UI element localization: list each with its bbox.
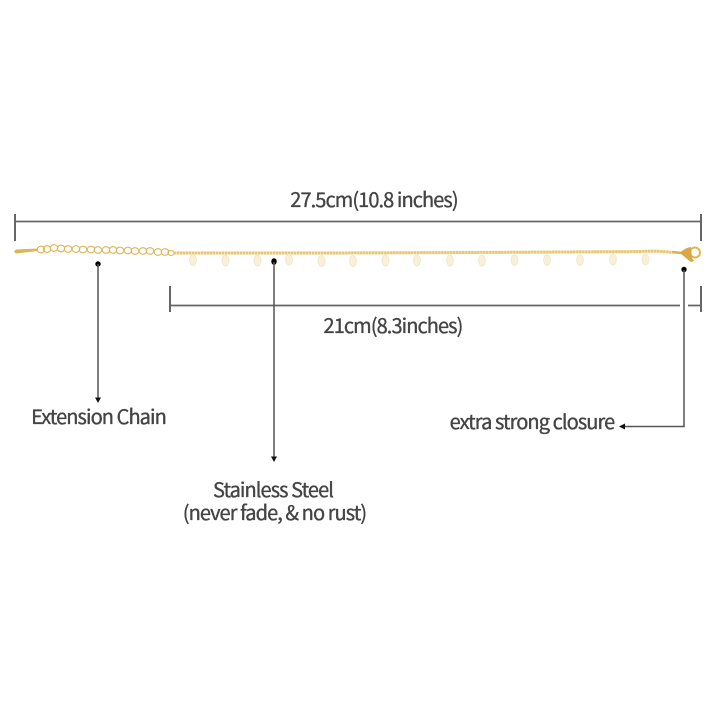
end tab xyxy=(14,248,38,254)
label: stainless steel xyxy=(183,474,366,526)
lobster clasp xyxy=(672,247,700,262)
pointer: closure xyxy=(619,267,687,430)
label: total length: 27.5cm(10.8 inches) xyxy=(290,184,458,213)
dimension line: total length 27.5cm xyxy=(15,214,701,241)
label: extra strong closure: extra strong closure xyxy=(450,406,615,435)
dimension line: wrist length 21cm xyxy=(170,286,701,312)
label: stainless steel: (never fade, & no rust) xyxy=(183,497,366,526)
pointer: extension chain xyxy=(95,261,101,403)
label: wrist length: 21cm(8.3inches) xyxy=(324,310,462,339)
bracelet xyxy=(14,245,700,266)
main chain xyxy=(174,251,672,253)
pointer: stainless steel xyxy=(271,258,277,462)
extension chain links xyxy=(37,245,174,255)
label: extension chain: Extension Chain xyxy=(31,401,166,430)
charm beads xyxy=(190,254,649,266)
label: stainless steel: Stainless Steel xyxy=(213,474,333,503)
